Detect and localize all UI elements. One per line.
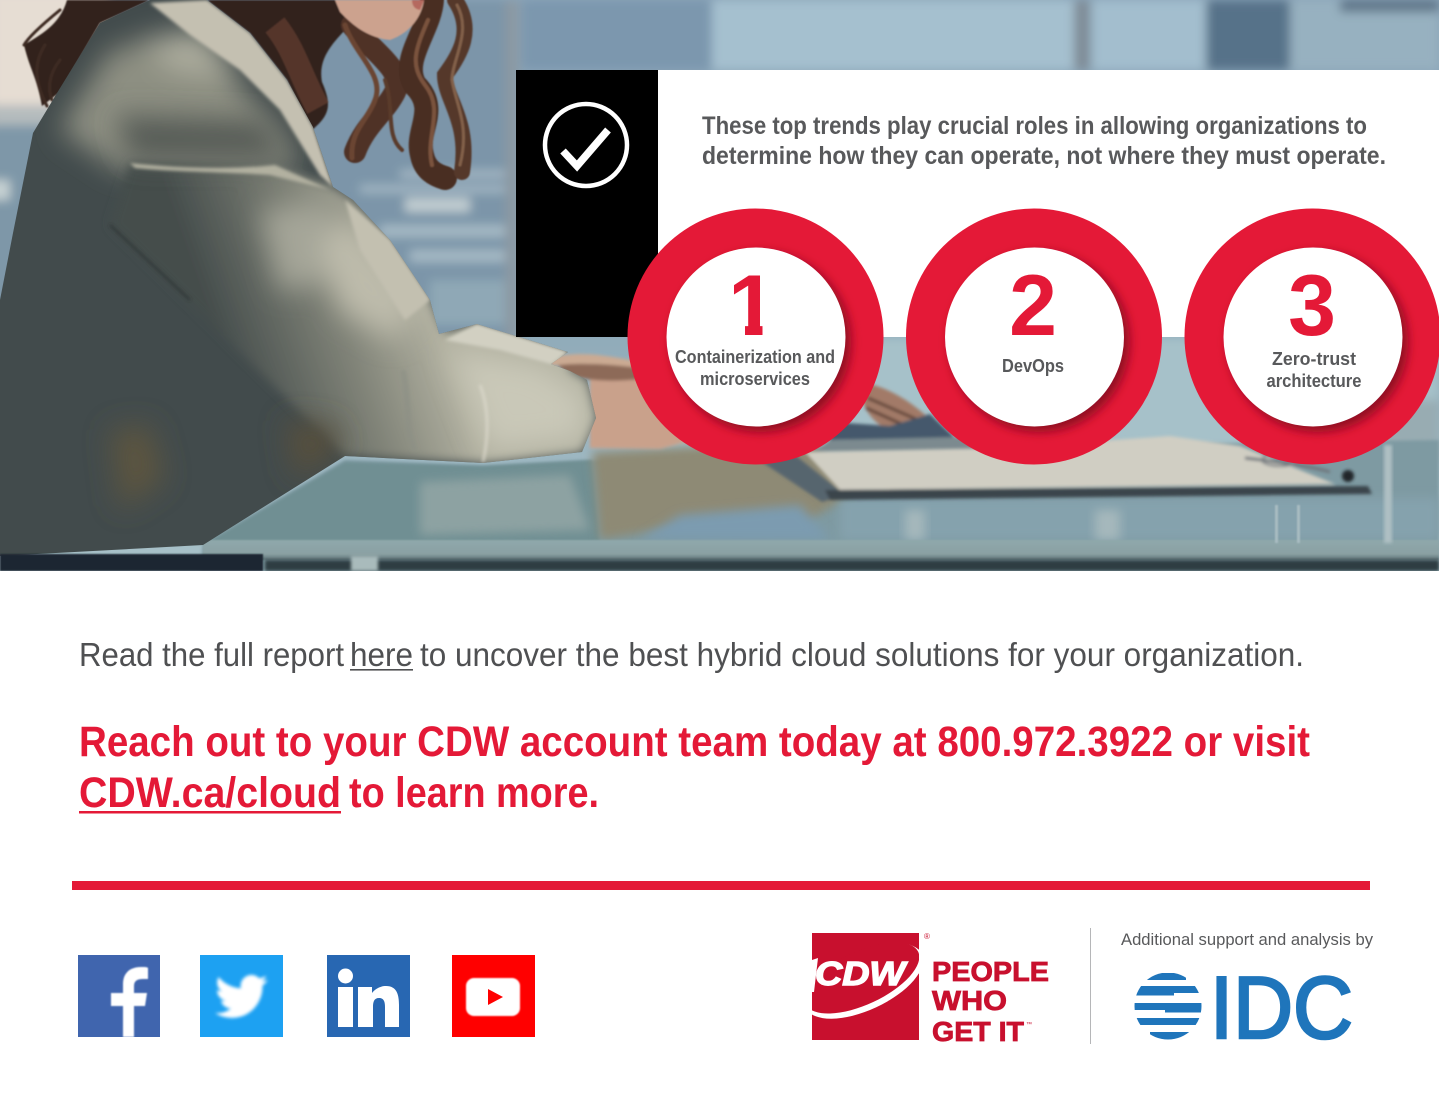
heading: intro statement: determine how they can operate, not where they must operate. [702,142,1386,170]
call to action: to learn more. [349,769,599,817]
badge 3: zero-trust architecture [1184,208,1439,464]
call to action [79,718,1310,817]
paperwork on desk [762,436,1372,502]
badge 3: zero-trust architecture: 3 [1288,258,1336,354]
badge 3: zero-trust architecture: Zero-trust [1272,349,1356,369]
desk [200,440,1439,571]
badge 1: containerization and microservices: 1 [728,258,776,354]
logo: CDW People Who Get It [812,933,1048,1042]
text block: read the full report: Read the full report [79,636,344,673]
red rule [72,881,1370,890]
logo: CDW People Who Get It: CDW [815,955,908,992]
forearm and hands [548,354,1000,452]
text block: read the full report [79,636,1304,673]
text block: read the full report: here [350,636,413,673]
woman: hair [24,0,465,178]
badge 1: containerization and microservices: microservices [700,369,810,389]
panel: intro text background [658,70,1439,337]
woman: jacket [0,0,610,570]
call to action: Reach out to your CDW account team today at 800.972.3922 or visit [79,718,1310,766]
call to action: CDW.ca/cloud [79,769,341,817]
text: additional support credit: Additional support and analysis by [1121,930,1373,949]
background photo: woman working at a glass desk [0,0,1439,571]
badge 3: zero-trust architecture: architecture [1266,371,1362,391]
text block: read the full report: to uncover the best hybrid cloud solutions for your organization. [420,636,1304,673]
icon: linkedin [327,955,410,1037]
badge 1: containerization and microservices: Containerization and [675,347,835,367]
heading: intro statement [702,112,1386,170]
icon: check mark in circle [545,104,627,186]
badge 1: containerization and microservices [628,208,884,464]
badge 2: DevOps [906,208,1162,464]
icon: youtube [452,955,535,1037]
badge 2: DevOps: 2 [1009,258,1057,354]
logo: CDW People Who Get It: PEOPLE [932,956,1049,987]
divider [1090,928,1091,1044]
logo: CDW People Who Get It: WHO [932,985,1007,1016]
panel: black check tab [516,70,658,337]
heading: intro statement: These top trends play crucial roles in allowing organizations to [702,112,1367,140]
logo: CDW People Who Get It: ™ [1026,1021,1032,1028]
logo: IDC: IDC [1210,958,1353,1057]
icon: facebook [78,955,160,1037]
logo: CDW People Who Get It: ® [924,932,930,941]
icon: twitter [200,955,283,1037]
badge 2: DevOps: DevOps [1002,356,1064,376]
logo: IDC [1134,973,1352,1040]
logo: CDW People Who Get It: GET IT [932,1016,1024,1047]
